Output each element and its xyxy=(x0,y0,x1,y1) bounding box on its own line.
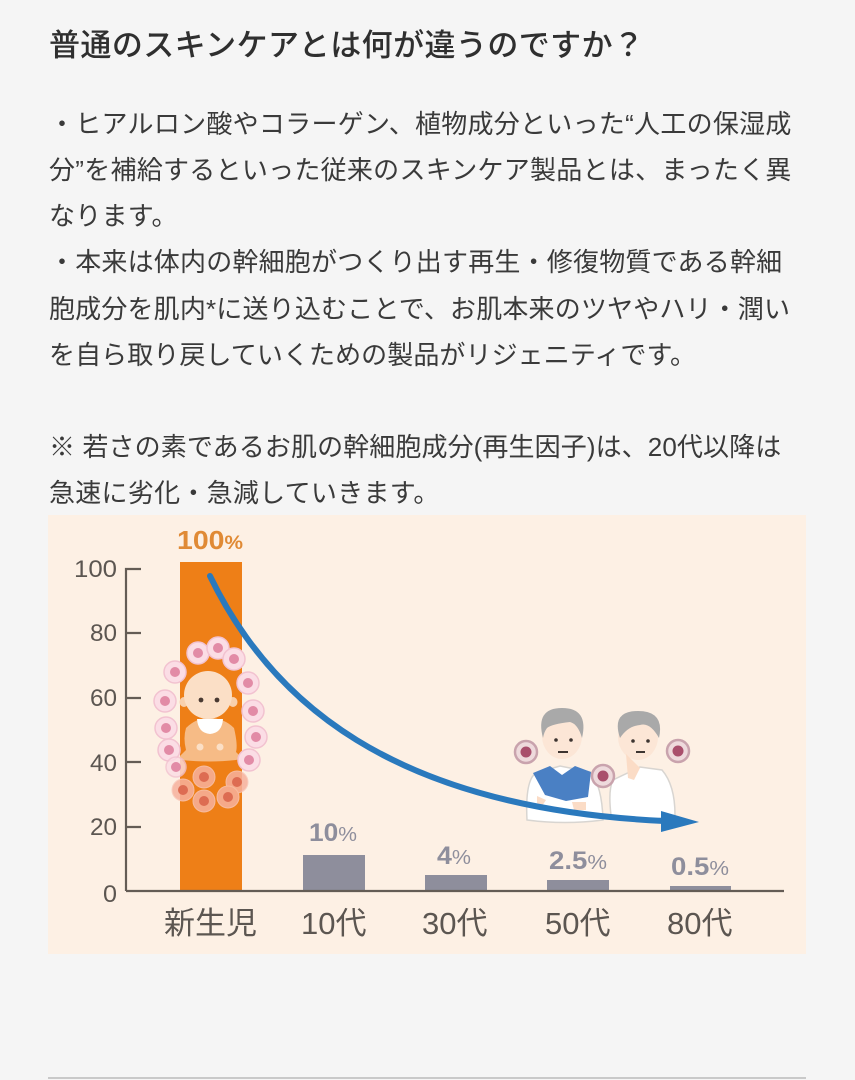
value labels xyxy=(177,525,729,881)
bar chart panel xyxy=(48,515,806,954)
icon: baby with stem cells xyxy=(154,637,267,812)
text block: explanation: を自ら取り戻していくための製品がリジェニティです。 xyxy=(49,340,696,370)
text block: note: 急速に劣化・急減していきます。 xyxy=(49,478,440,508)
y axis: 0 xyxy=(103,881,117,908)
category labels: 50代 xyxy=(545,906,610,941)
text block: explanation: ・ヒアルロン酸やコラーゲン、植物成分といった“人工の保湿成 xyxy=(49,109,792,139)
y axis: 20 xyxy=(90,814,117,841)
text block: note: ※ 若さの素であるお肌の幹細胞成分(再生因子)は、20代以降は xyxy=(49,432,781,462)
text block: explanation: 分”を補給するといった従来のスキンケア製品とは、まったく異 xyxy=(49,155,792,185)
y axis: 100 xyxy=(74,556,117,583)
y axis: 40 xyxy=(90,750,117,777)
y axis: 80 xyxy=(90,620,117,647)
category labels: 30代 xyxy=(422,906,487,941)
text block: explanation: なります。 xyxy=(49,201,178,231)
category labels: 新生児 xyxy=(164,906,257,941)
text block: note xyxy=(49,432,781,508)
text block: explanation xyxy=(49,109,792,370)
text block: explanation: ・本来は体内の幹細胞がつくり出す再生・修復物質である幹細 xyxy=(49,247,782,277)
title: 普通のスキンケアとは何が違うのですか？ xyxy=(49,28,644,63)
value labels: 0.5% xyxy=(671,853,729,881)
x axis line xyxy=(126,890,784,892)
divider xyxy=(48,1077,806,1079)
value labels: 10% xyxy=(309,819,357,847)
text block: explanation: 胞成分を肌内*に送り込むことで、お肌本来のツヤやハリ・潤い xyxy=(49,294,790,324)
category labels xyxy=(164,906,732,941)
value labels: 100% xyxy=(177,525,243,555)
category labels: 10代 xyxy=(301,906,366,941)
value labels: 4% xyxy=(437,842,471,870)
bars xyxy=(180,562,731,891)
value labels: 2.5% xyxy=(549,847,607,875)
arrow: decline curve xyxy=(210,576,699,832)
icon: elderly couple with stem cells xyxy=(515,708,689,822)
y axis: 60 xyxy=(90,685,117,712)
y axis xyxy=(74,556,141,908)
category labels: 80代 xyxy=(667,906,732,941)
